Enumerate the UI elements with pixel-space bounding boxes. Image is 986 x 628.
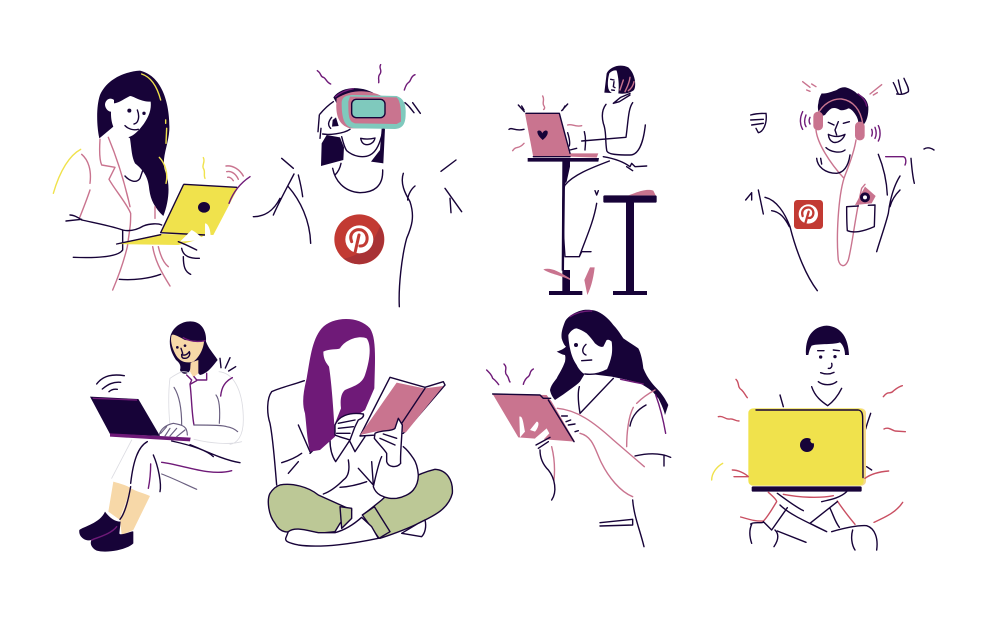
shirt lines: [578, 378, 671, 466]
pinterest square badge: [794, 200, 823, 229]
faceless head: [323, 337, 370, 425]
short hair: [604, 66, 635, 94]
right hand: [374, 418, 402, 467]
arm sound waves: [226, 166, 243, 181]
shirt lines: [112, 372, 243, 478]
lower body lines: [600, 500, 644, 547]
yellow laptop: [115, 184, 238, 245]
face: [818, 350, 839, 385]
stool: [603, 190, 657, 295]
pink shoes: [543, 267, 595, 295]
VR headset: [336, 91, 406, 129]
figure: woman sitting with dark laptop: [79, 321, 243, 552]
blazer lines: [79, 137, 170, 290]
white top: [268, 381, 373, 494]
table: [528, 158, 599, 295]
bare legs: [108, 482, 150, 535]
green trousers: [268, 469, 452, 538]
figure: woman with VR headset: [226, 65, 462, 307]
left hand: [335, 413, 364, 440]
face: [171, 335, 205, 362]
hand on headset: [318, 102, 350, 138]
body lines: [746, 148, 934, 291]
figure: man with headphones and pinterest badge: [746, 78, 934, 291]
neck: [190, 360, 198, 377]
dark laptop: [90, 397, 191, 441]
hair: [806, 326, 849, 355]
hair: [170, 321, 218, 375]
bare feet: [286, 517, 426, 546]
pocket with music player: [847, 187, 876, 232]
yellow laptop: [748, 408, 866, 492]
figure: woman at high table with pink laptop: [509, 66, 657, 295]
face: [105, 96, 151, 138]
motion squiggles: [317, 65, 415, 90]
figure: woman reading book cross-legged: [268, 319, 452, 546]
hair: [550, 310, 668, 415]
sound waves: [800, 112, 880, 141]
crossed legs: [750, 492, 877, 550]
pink tablet: [493, 394, 575, 442]
hair: [321, 88, 385, 166]
shirt lines: [780, 387, 872, 470]
body lines: [253, 103, 462, 307]
hair: [818, 87, 868, 125]
face: [342, 129, 383, 157]
squiggles: [487, 364, 533, 385]
pointing fingers: [562, 416, 578, 432]
figure: woman in blazer with yellow laptop: [53, 71, 238, 290]
figure: woman with pink tablet: [487, 310, 671, 547]
typing hand: [159, 423, 187, 437]
headphones: [813, 99, 865, 140]
pinterest round badge: [334, 214, 384, 264]
shoulder rays: [220, 358, 236, 371]
right puff sleeve: [373, 447, 418, 498]
earphone cord: [816, 130, 865, 266]
purple hair: [303, 319, 375, 452]
figure: man with large yellow laptop: [712, 326, 905, 550]
holding hand: [519, 416, 555, 500]
long dark hair: [97, 71, 169, 216]
raised fists: [751, 78, 909, 133]
wifi waves: [97, 375, 124, 392]
happy face: [826, 122, 849, 152]
open book: [360, 377, 445, 436]
face: [568, 328, 612, 374]
body lines: [563, 93, 647, 257]
shoes: [79, 512, 133, 552]
pink laptop: [525, 113, 598, 158]
hand: [178, 223, 211, 274]
red squiggles and legs: [718, 379, 905, 524]
screen rays and squiggles: [509, 96, 582, 151]
